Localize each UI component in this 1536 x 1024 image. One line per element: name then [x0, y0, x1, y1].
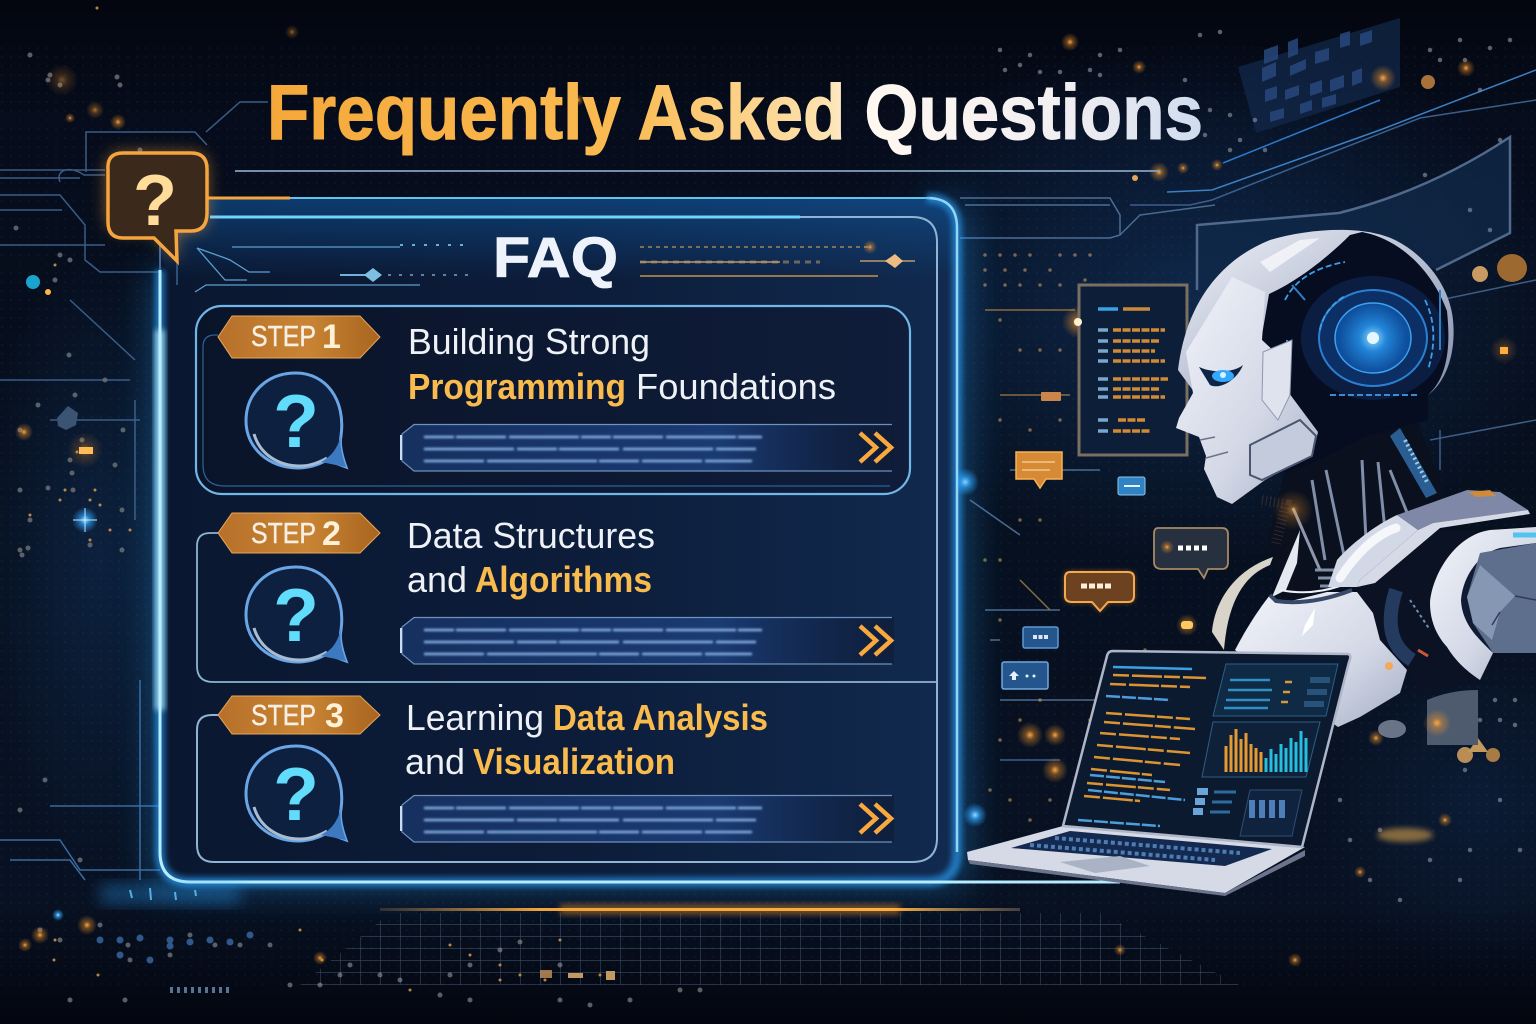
step 3 badge: STEP	[251, 700, 316, 732]
robot arm joint	[1358, 530, 1480, 695]
step 1 badge: STEP	[251, 321, 316, 353]
robot	[1176, 230, 1536, 746]
step 1 question icon	[246, 373, 346, 468]
lower screen widgets	[1193, 788, 1302, 836]
step 3 badge: 3	[325, 697, 344, 735]
robot face	[1176, 277, 1318, 504]
step 2 heading: Algorithms	[475, 559, 652, 600]
lower cylinder	[1368, 690, 1478, 746]
code monitor	[1074, 285, 1187, 455]
right curved panel	[1197, 137, 1510, 290]
floor grid and orange line	[100, 884, 1240, 985]
step 3 heading: and	[405, 741, 465, 782]
step 3 heading: Learning	[406, 697, 544, 738]
decorative circuit lines	[195, 247, 420, 292]
step 2 heading: Data Structures	[407, 515, 655, 556]
step 1 badge	[218, 316, 380, 358]
bar chart on screen	[1202, 722, 1320, 777]
step 2 badge: 2	[322, 515, 341, 553]
step 3 heading: Visualization	[473, 741, 675, 782]
step 2 badge: STEP	[251, 518, 316, 550]
step 3 question icon	[246, 746, 346, 841]
panel: step 3	[218, 696, 894, 842]
robot arm	[1430, 527, 1536, 680]
panel: step 1	[196, 306, 910, 494]
step 1 heading: Foundations	[636, 366, 836, 407]
laptop base	[967, 826, 1305, 896]
glass bubble	[1154, 528, 1228, 578]
step 2 badge	[218, 513, 380, 553]
code lines	[1078, 667, 1206, 826]
title: Frequently Asked Questions	[267, 68, 1203, 156]
laptop screen	[1063, 651, 1350, 847]
laptop	[967, 651, 1350, 896]
step 1 heading: Building Strong	[408, 321, 650, 362]
right decorative orange lines	[640, 240, 915, 276]
inner frame	[197, 217, 937, 862]
robot brain cavity	[1261, 232, 1448, 476]
step 3 heading	[405, 697, 768, 782]
step 1 heading	[408, 321, 836, 407]
hexagon	[57, 406, 78, 430]
icon: orange question bubble: ?	[133, 161, 177, 241]
robot neck	[1262, 415, 1445, 600]
step 1 badge: 1	[322, 318, 341, 356]
blue dots button	[1023, 627, 1058, 648]
orange dots bubble	[1065, 572, 1134, 611]
step 2 heading: and	[407, 559, 467, 600]
step 1 heading: Programming	[408, 366, 626, 407]
panel: FAQ container	[155, 171, 1160, 882]
robot chest	[1212, 530, 1407, 727]
step 1 detail bar	[401, 424, 894, 471]
robot shoulder plate	[1328, 490, 1530, 587]
circuit lines	[0, 70, 1536, 880]
step 2 detail bar	[401, 617, 894, 664]
panel: FAQ container: FAQ	[493, 226, 618, 290]
robot helmet	[1178, 230, 1454, 410]
top right status panel	[1213, 664, 1338, 716]
step 3 badge	[218, 696, 380, 735]
orange tag	[1041, 392, 1061, 401]
step 3 detail bar	[401, 795, 894, 842]
blue arrow button	[1002, 662, 1048, 689]
orange indicator	[1176, 614, 1198, 636]
step 3 heading: Data Analysis	[553, 697, 768, 738]
blue small bubble	[1118, 477, 1145, 495]
glows	[26, 275, 40, 289]
step 2 heading	[407, 515, 655, 600]
panel: step 2	[197, 513, 937, 682]
robot head glint	[1260, 238, 1320, 272]
step 2 question icon	[246, 567, 346, 662]
icon: orange question bubble	[107, 153, 290, 261]
orange note bubble	[1016, 452, 1062, 488]
chat bubbles	[1002, 392, 1228, 689]
